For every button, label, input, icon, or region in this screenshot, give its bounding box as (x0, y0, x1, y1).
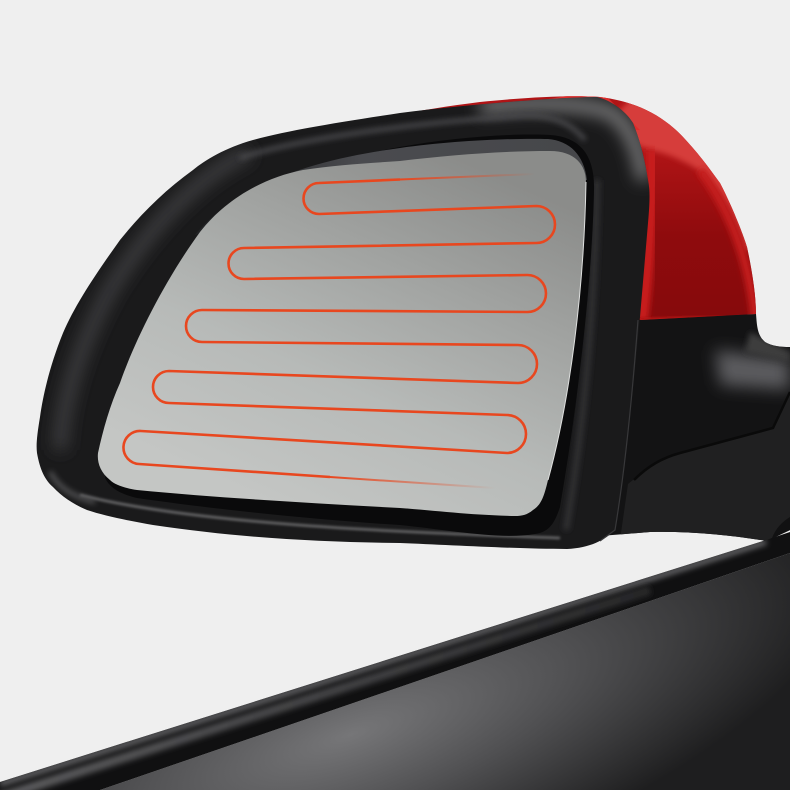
mirror glass (98, 151, 586, 516)
mirror arm (609, 314, 790, 540)
red housing (419, 96, 756, 320)
recess reflection strip (195, 139, 587, 235)
car door panel (0, 532, 790, 790)
heating element wire (123, 174, 555, 488)
mirror glass recess (105, 135, 594, 536)
black mirror frame (37, 97, 650, 549)
